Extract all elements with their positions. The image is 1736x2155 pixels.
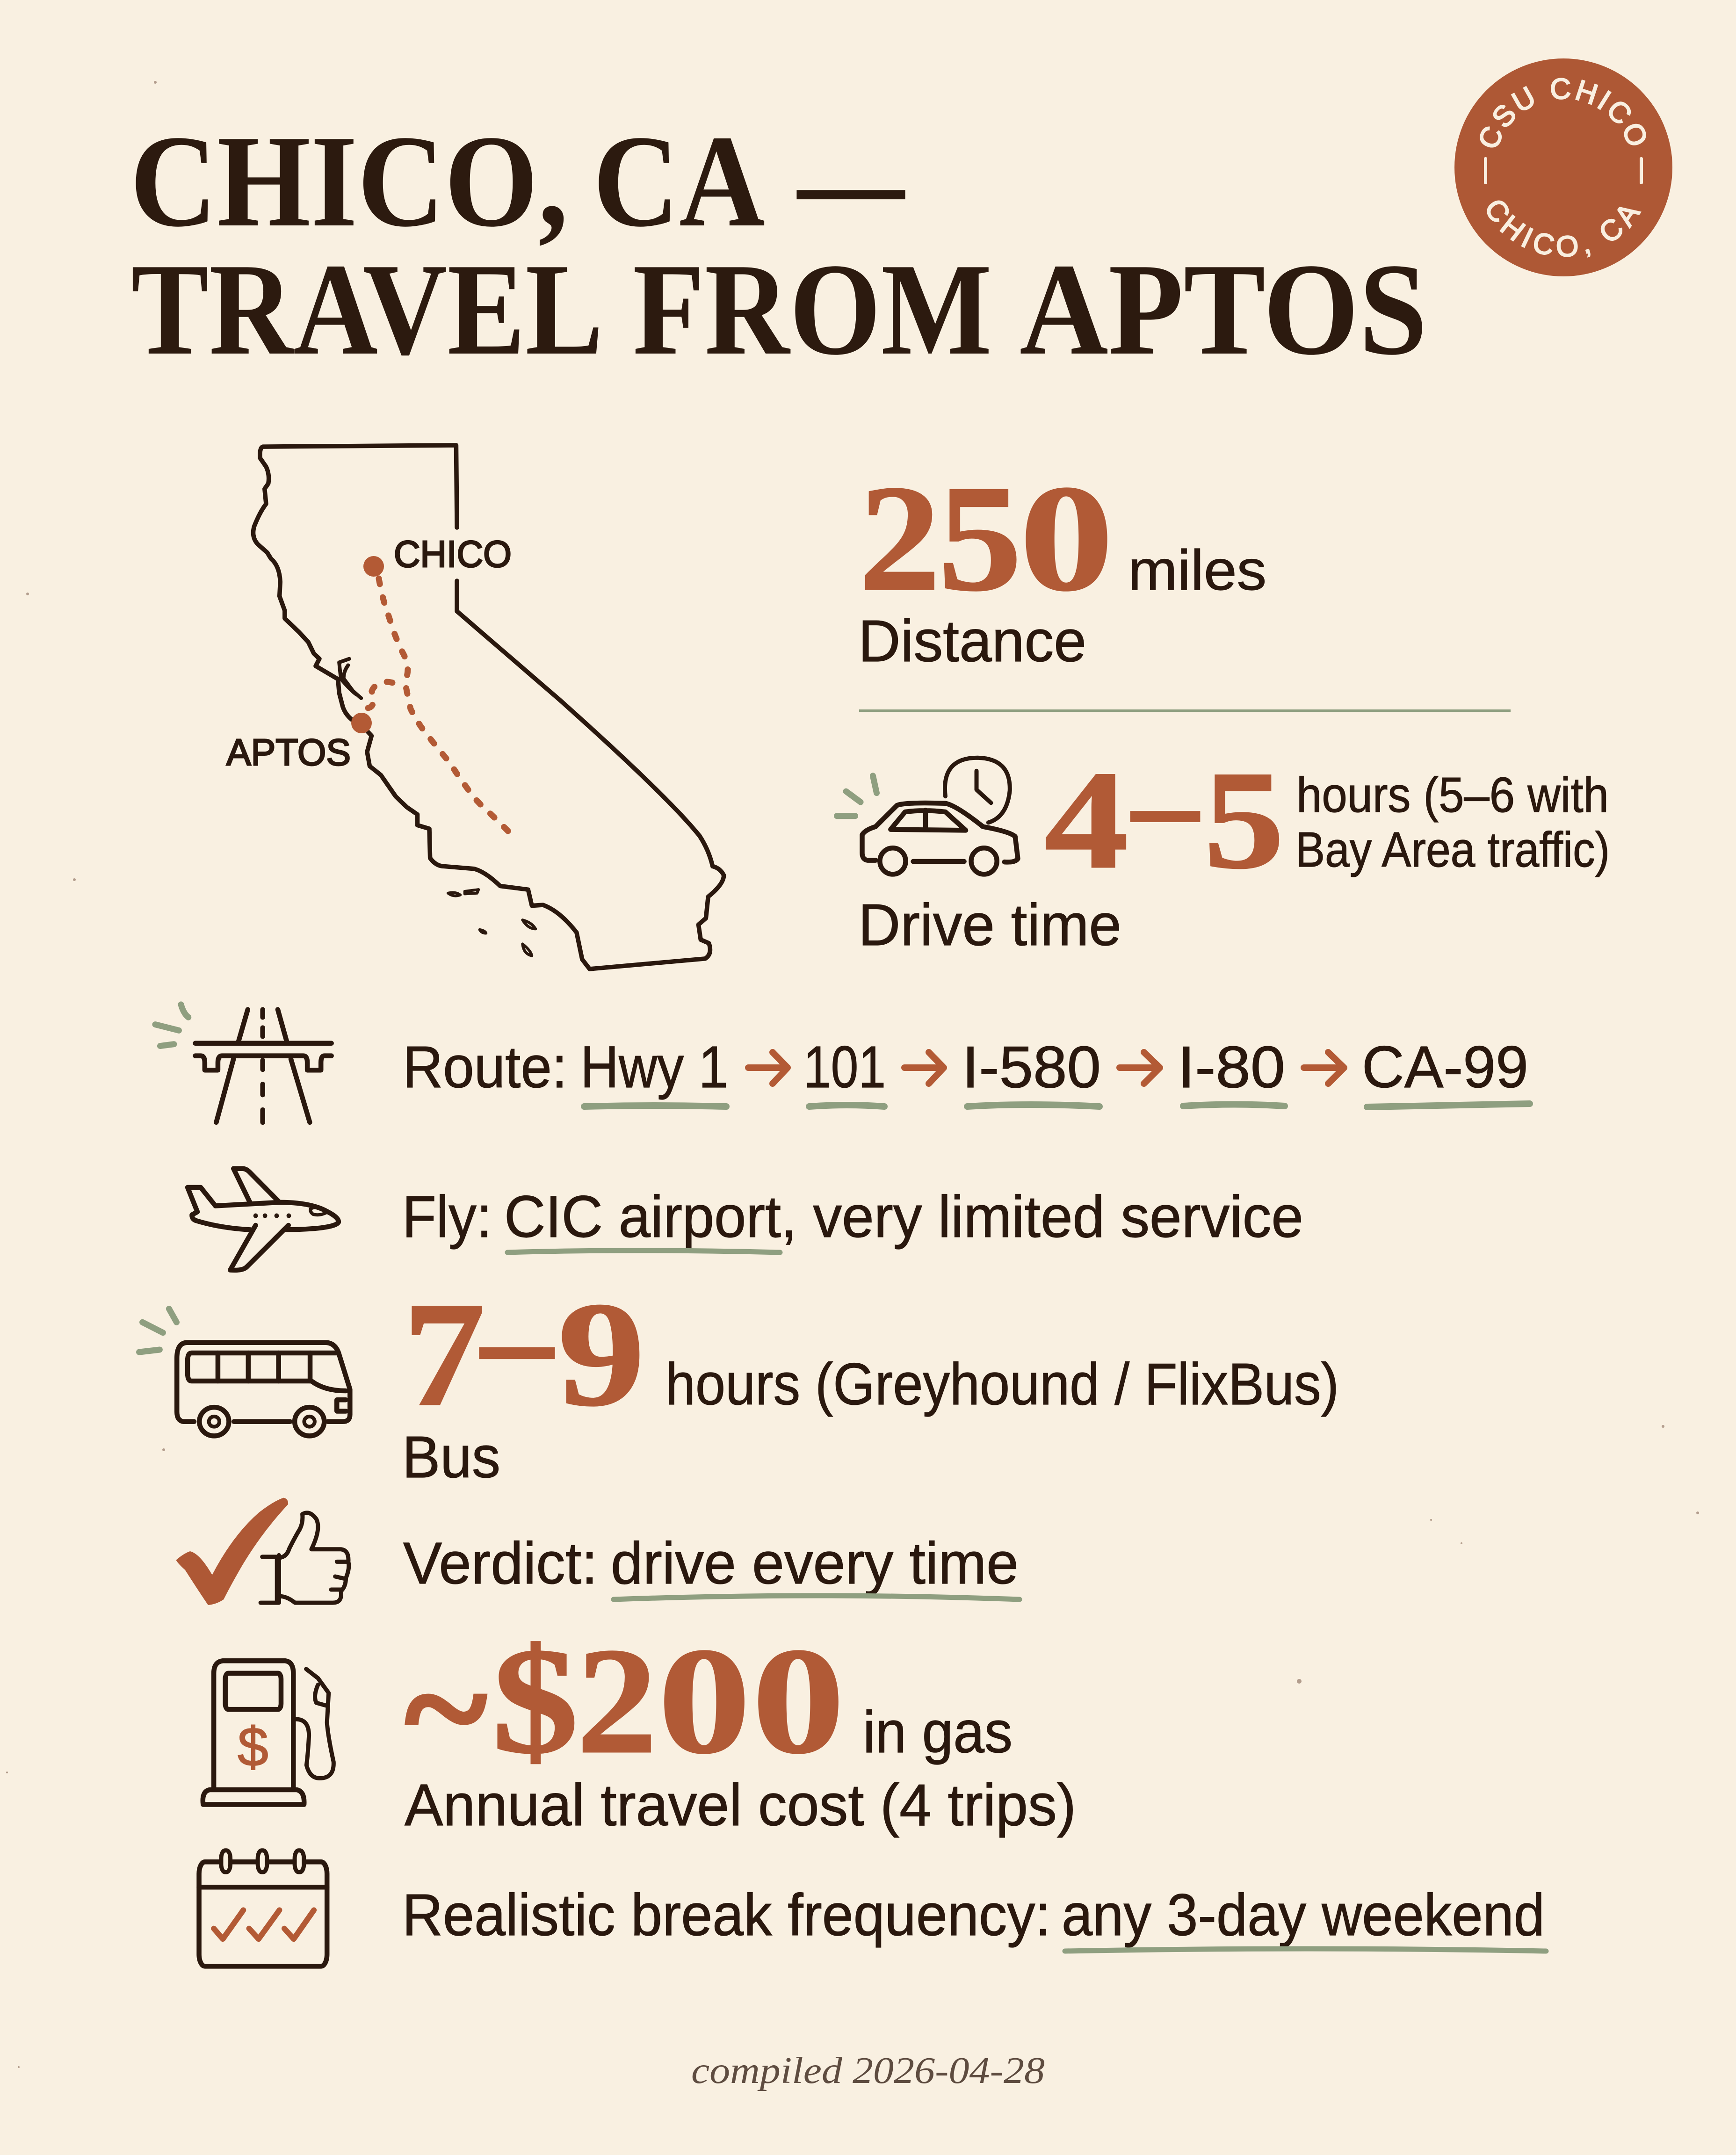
stat: drive time: 4 — [1044, 742, 1128, 897]
stat: gas cost: $ — [492, 1617, 579, 1785]
verdict row: drive every time — [611, 1530, 1019, 1596]
icon: car with clock — [837, 758, 1018, 874]
verdict row: Verdict: — [403, 1530, 598, 1596]
break frequency row: any 3-day weekend — [1062, 1882, 1545, 1948]
arrow — [1304, 1052, 1344, 1084]
fly row: , very limited service — [781, 1184, 1303, 1250]
stat: bus time — [402, 1255, 1339, 1490]
title: APTOS — [1020, 236, 1427, 382]
stat: gas cost: 2 — [577, 1617, 657, 1785]
arrow — [904, 1052, 944, 1084]
fly row — [402, 1184, 1303, 1252]
arrow — [1120, 1052, 1160, 1084]
stat: gas cost: ~ — [405, 1624, 487, 1793]
route row: I-580 — [962, 1034, 1101, 1100]
label: Aptos: APTOS — [226, 731, 351, 773]
fly row: CIC airport — [504, 1184, 781, 1250]
route row: CA-99 — [1362, 1034, 1528, 1100]
stat: bus time: 7 — [403, 1272, 485, 1437]
stat: bus time: 9 — [558, 1272, 645, 1437]
badge: CSU Chico stamp: CSU CHICO — [1472, 72, 1655, 154]
stat: distance: 5 — [938, 454, 1022, 622]
stat: bus time: – — [478, 1255, 556, 1421]
icon: gas pump — [203, 1661, 333, 1805]
title: — — [796, 108, 906, 254]
marker: Aptos — [351, 713, 372, 733]
icon: calendar — [199, 1851, 327, 1966]
stat: distance: 2 — [859, 454, 940, 622]
footer date: compiled 2026-04-28 — [691, 2050, 1045, 2091]
title — [130, 108, 1427, 382]
stat: gas cost: 0 — [658, 1617, 751, 1785]
title: TRAVEL — [131, 236, 603, 382]
stat: gas cost: Annual travel cost (4 trips) — [405, 1772, 1076, 1838]
stat: drive time: Bay Area traffic) — [1295, 822, 1610, 877]
stat: drive time — [858, 724, 1610, 958]
route row: Route: — [403, 1034, 567, 1100]
route row: I-80 — [1178, 1034, 1285, 1100]
route row: Hwy 1 — [580, 1034, 728, 1100]
divider — [859, 709, 1511, 712]
badge: CSU Chico stamp: CHICO, CA — [1478, 193, 1649, 264]
route row: 101 — [803, 1034, 886, 1100]
label: Chico: CHICO — [394, 533, 512, 575]
stat: gas cost: 0 — [752, 1617, 845, 1785]
map: California outline with route — [226, 445, 724, 969]
icon: airplane — [188, 1169, 339, 1270]
stat: drive time: hours (5–6 with — [1296, 767, 1609, 823]
stat: bus time: hours (Greyhound / FlixBus) — [665, 1351, 1339, 1417]
icon: bus — [139, 1309, 350, 1436]
stat: drive time: Drive time — [858, 892, 1121, 958]
icon: highway overpass — [155, 1005, 332, 1122]
state outline — [253, 445, 724, 969]
title: CA — [593, 108, 765, 254]
badge: CSU Chico stamp — [1454, 58, 1672, 276]
icon: gas pump dollar sign: $ — [238, 1716, 268, 1778]
arrow — [748, 1052, 788, 1084]
route row — [403, 1034, 1530, 1107]
stat: drive time: 5 — [1204, 742, 1284, 897]
stat: distance: miles — [1128, 538, 1266, 602]
title: CHICO, — [130, 108, 568, 254]
route: dotted line — [368, 579, 511, 834]
break frequency row — [402, 1882, 1546, 1951]
stat: distance: Distance — [858, 608, 1086, 674]
marker: Chico — [363, 556, 384, 577]
stat: distance: 0 — [1020, 454, 1114, 622]
fly row: Fly: — [402, 1184, 492, 1250]
title: FROM — [633, 236, 992, 382]
stat: bus time: Bus — [402, 1424, 500, 1490]
stat: drive time: – — [1130, 724, 1201, 880]
stat: gas cost: in gas — [863, 1699, 1013, 1765]
stat: gas cost — [405, 1617, 1076, 1838]
break frequency row: Realistic break frequency: — [402, 1882, 1051, 1948]
icon: check and thumbs up — [176, 1498, 349, 1605]
verdict row — [403, 1530, 1020, 1599]
stat: distance — [858, 454, 1266, 674]
